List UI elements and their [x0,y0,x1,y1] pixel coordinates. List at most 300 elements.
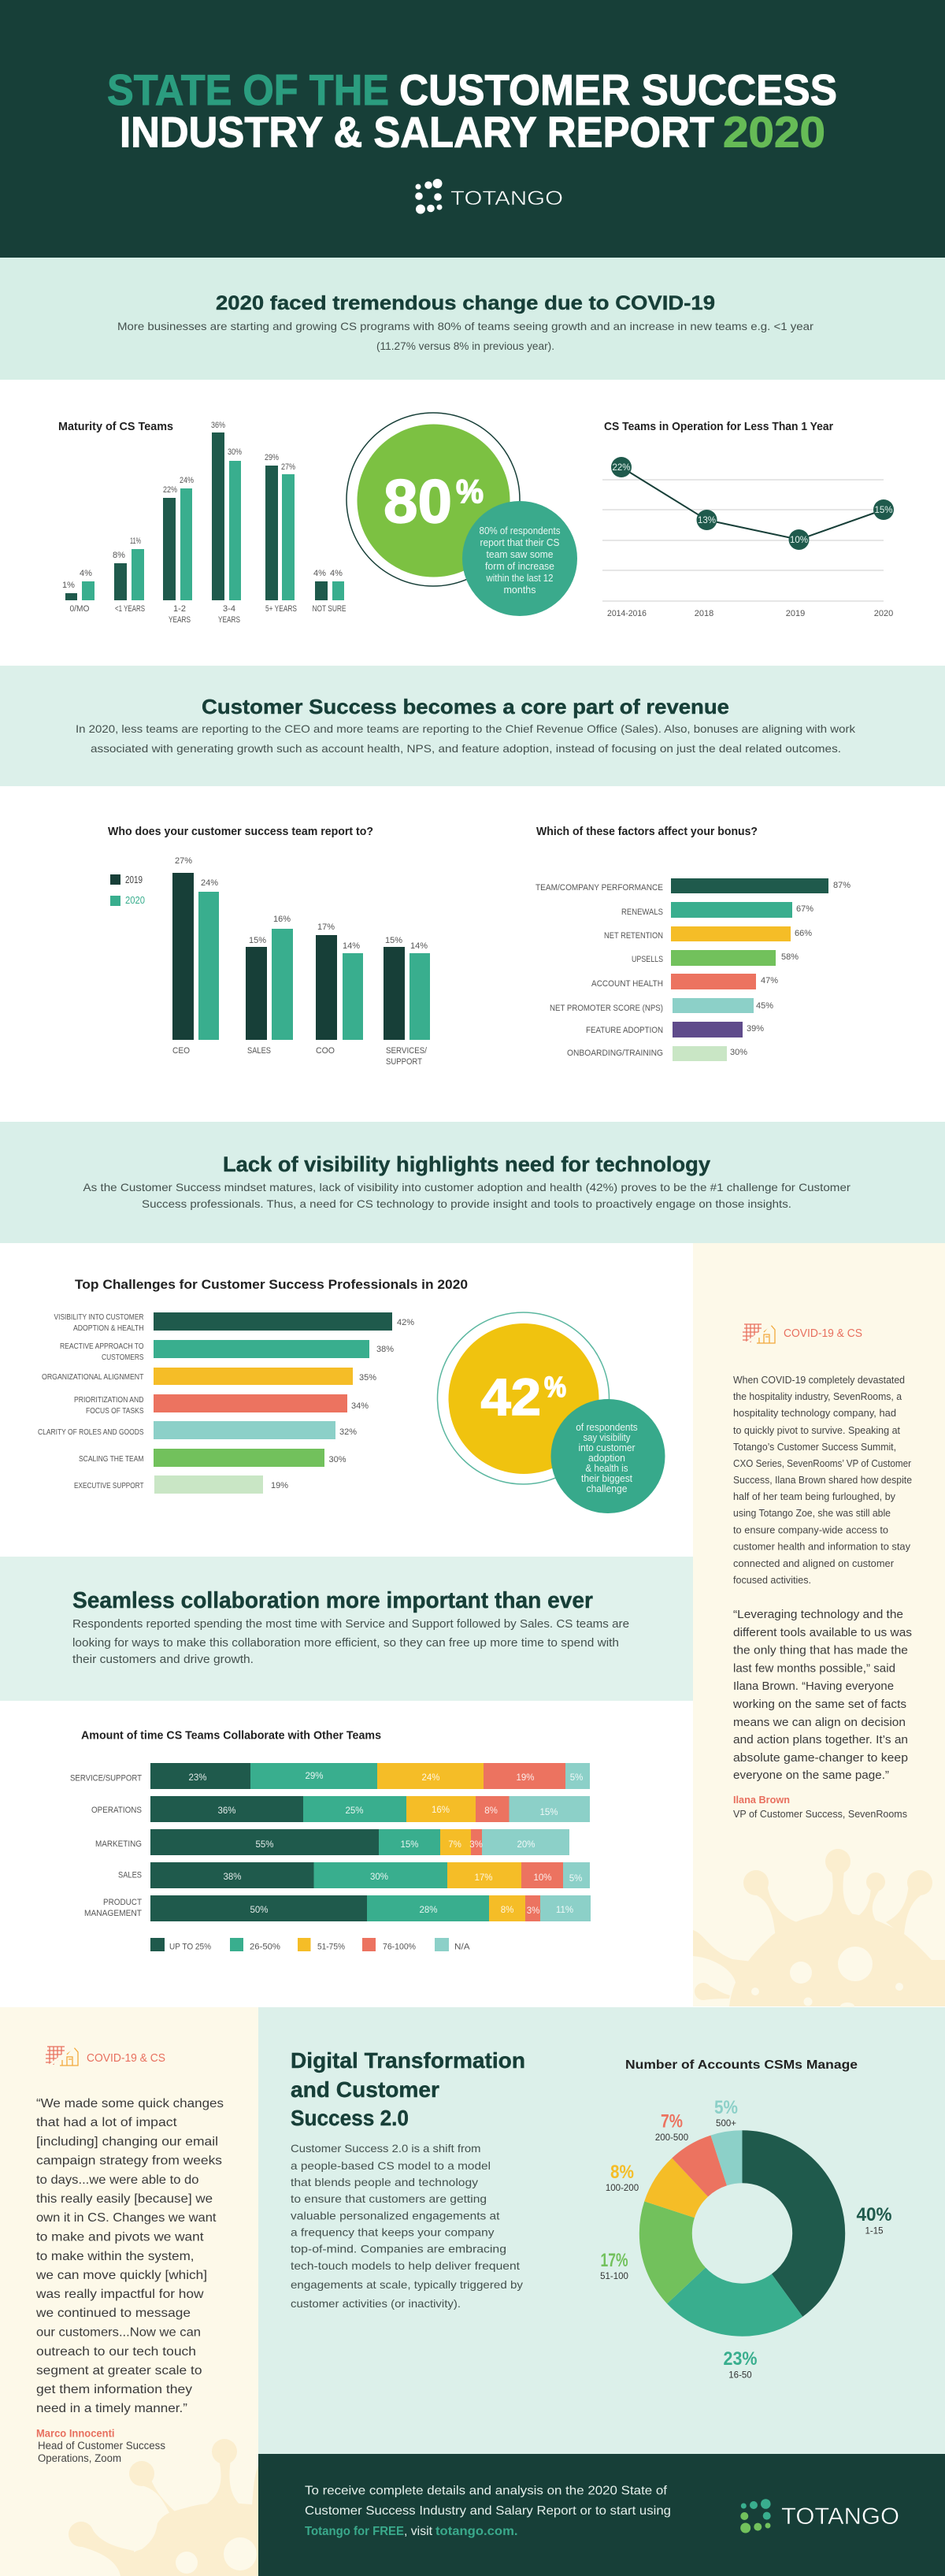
callout bubble: of respondents [576,1422,638,1433]
donut labels [600,2097,891,2381]
legend: N/A [454,1943,470,1952]
chart title: CS Teams in Operation for Less Than 1 Year [604,420,833,433]
value labels: 8% [113,551,125,560]
quote: segment at greater scale to [36,2364,202,2377]
bar values: 32% [339,1427,357,1437]
bar labels: PRIORITIZATION AND [74,1395,144,1405]
donut labels: 16-50 [728,2371,752,2381]
heading: Success 2.0 [291,2106,409,2130]
attribution [36,2428,165,2464]
chart title: Who does your customer success team report to? [108,825,373,838]
big number: 80 [384,466,452,536]
axis labels: SERVICES/ [386,1046,428,1056]
story text: Totango’s Customer Success Summit, [733,1441,896,1453]
axis labels: 2020 [874,609,893,618]
bar values: 45% [756,1001,773,1011]
row: marketing: 20% [517,1840,536,1850]
bar labels [38,1312,144,1490]
footer text: Customer Success Industry and Salary Report or to start using [305,2504,671,2518]
row: product management: 3% [527,1906,539,1916]
heading: 2020 faced tremendous change due to COVID-19 [216,292,715,314]
value labels [175,856,428,951]
bar values: 66% [795,929,812,938]
quote: this really easily [because] we [36,2192,213,2206]
heading: Seamless collaboration more important than ever [72,1588,593,1613]
section text: As the Customer Success mindset matures, lack of visibility into customer adoption and health (42%) proves to be the #1 challenge for Customer [83,1181,850,1193]
title: INDUSTRY & SALARY REPORT [120,107,714,156]
story text: the hospitality industry, SevenRooms, a [733,1390,902,1402]
bar values [271,1318,414,1490]
footer text [305,2485,671,2538]
value labels: 4% [330,569,343,578]
row: operations: 16% [432,1806,450,1815]
bar values: 87% [833,881,850,890]
legend [110,874,145,906]
legend: 26-50% [250,1943,280,1952]
row: product management: 28% [419,1906,438,1915]
body text: customer activities (or inactivity). [291,2297,461,2310]
section text: Respondents reported spending the most time with Service and Support followed by Sales. CS teams are [72,1617,629,1631]
intro text: More businesses are starting and growing CS programs with 80% of teams seeing growth and an increase in new teams e.g. <1 year [117,320,813,332]
bar values: 38% [376,1345,394,1354]
row: product management: 8% [501,1906,513,1915]
virus spots [751,1947,903,2010]
bars 2019 [172,873,405,1040]
value labels: 4% [80,569,92,578]
value labels: 29% [265,453,279,462]
row labels [70,1774,142,1918]
data points: 15% [874,506,893,515]
bar values: 34% [351,1401,369,1411]
axis labels: 2018 [695,609,713,618]
bar values: 30% [730,1048,747,1057]
section text: Success professionals. Thus, a need for CS technology to provide insight and tools to proactively engage on those insights. [142,1197,791,1210]
body text: valuable personalized engagements at [291,2209,500,2222]
bar labels: ORGANIZATIONAL ALIGNMENT [42,1372,144,1382]
row: service/support: 19% [516,1773,535,1783]
intro text: (11.27% versus 8% in previous year). [376,340,554,352]
footer text: , visit [404,2525,433,2538]
bar labels: EXECUTIVE SUPPORT [74,1481,144,1490]
body text [291,2142,523,2310]
story text: hospitality technology company, had [733,1407,896,1419]
intro text [117,320,813,352]
bar labels: CLARITY OF ROLES AND GOODS [38,1427,143,1437]
axis labels: COO [316,1046,335,1056]
value labels: 15% [249,936,266,945]
axis labels: NOT SURE [312,604,346,614]
icon: building and house [743,1322,775,1345]
body text: Customer Success 2.0 is a shift from [291,2142,480,2155]
bar values: 19% [271,1481,288,1490]
callout bubble: form of increase [485,561,554,572]
quote: different tools available to us was [733,1627,912,1639]
quote: to days...we were able to do [36,2173,199,2187]
axis labels: 3-4 [223,604,235,614]
body text: a frequency that keeps your company [291,2226,495,2239]
heading: and Customer [291,2077,439,2102]
big number: % [544,1371,566,1403]
quote: we can move quickly [which] [35,2269,207,2282]
row labels: MANAGEMENT [84,1909,142,1918]
donut slices [665,2157,819,2310]
callout bubble [551,1399,665,1513]
heading [291,2048,525,2130]
axis labels: 5+ YEARS [265,604,297,614]
story text: half of her team being furloughed, by [733,1490,895,1502]
value labels: 16% [273,915,291,924]
value labels: 4% [313,569,326,578]
bar labels: ADOPTION & HEALTH [73,1323,143,1333]
callout: 80% [346,413,577,616]
body text: tech-touch models to help deliver frequent [291,2259,520,2272]
panel: COVID-19 and CS, SevenRooms [693,1243,945,2010]
quote: own it in CS. Changes we want [36,2211,217,2225]
footer call to action [258,2454,945,2576]
value labels: 24% [201,878,218,888]
value labels: 36% [211,421,225,430]
section text: looking for ways to make this collaboration more efficient, so they can free up more time to spend with [72,1636,619,1650]
section: revenue [0,666,945,786]
quote: and action plans together. It’s an [733,1734,908,1746]
axis labels: YEARS [169,615,191,625]
donut labels: 23% [723,2348,758,2370]
bar labels: REACTIVE APPROACH TO [60,1342,143,1351]
row labels: OPERATIONS [91,1806,142,1815]
attribution: VP of Customer Success, SevenRooms [733,1808,907,1820]
bar chart: top challenges [38,1277,468,1494]
donut labels: 17% [600,2250,628,2271]
row: marketing: 3% [469,1840,483,1850]
quote [732,1609,912,1782]
axis labels [172,1046,428,1067]
value labels: 14% [410,941,428,951]
data points [611,457,894,550]
callout bubble: team saw some [487,549,554,560]
quote: “Leveraging technology and the [733,1609,903,1621]
quote: Ilana Brown. “Having everyone [733,1680,894,1693]
row: operations [150,1796,590,1822]
body text: engagements at scale, typically triggered by [291,2278,523,2291]
donut chart: number of accounts CSMs manage [600,2058,891,2381]
callout bubble: report that their CS [480,537,559,548]
legend: 76-100% [383,1943,416,1952]
bar chart: Maturity of CS Teams [58,420,346,625]
callout bubble: adoption [588,1453,625,1464]
footer text: totango.com. [435,2525,518,2538]
bar chart: factors affecting bonus [536,825,850,1061]
row: service/support [150,1763,590,1789]
row: marketing [150,1829,569,1855]
bar labels: CUSTOMERS [102,1353,143,1362]
row: marketing: 55% [255,1840,274,1850]
row: sales [150,1862,590,1888]
bar labels: TEAM/COMPANY PERFORMANCE [536,883,663,893]
axis labels: <1 YEARS [115,604,145,614]
quote: our customers...Now we can [36,2325,201,2340]
chart title: Maturity of CS Teams [58,420,173,433]
row: sales: 38% [223,1873,242,1882]
bar values: 47% [761,976,778,985]
story text: CXO Series, SevenRooms’ VP of Customer [733,1457,912,1469]
value labels [62,421,343,590]
body text: a people-based CS model to a model [291,2159,491,2172]
attribution: Marco Innocenti [36,2428,115,2439]
callout bubble [462,501,577,616]
value labels: 14% [343,941,360,951]
title: 2020 [723,107,825,156]
row labels: PRODUCT [103,1898,142,1907]
attribution: Head of Customer Success [38,2440,165,2452]
quote: was really impactful for how [35,2288,204,2301]
row: service/support: 23% [188,1773,207,1783]
chart title: Number of Accounts CSMs Manage [625,2058,858,2072]
row: operations: 36% [217,1806,236,1816]
row: operations: 8% [484,1806,498,1816]
bars 2019 series [65,432,328,600]
attribution: Ilana Brown [733,1794,790,1806]
row: sales: 30% [370,1873,388,1882]
chart title: Amount of time CS Teams Collaborate with Other Teams [81,1728,381,1743]
axis labels: 1-2 [173,604,186,614]
quote: working on the same set of facts [732,1698,906,1711]
data points: 10% [790,536,808,545]
quote: to make and pivots we want [36,2231,204,2244]
quote: “We made some quick changes [36,2097,224,2110]
row: marketing: 7% [448,1840,461,1850]
logo: Totango colour [740,2499,899,2533]
legend: UP TO 25% [169,1943,211,1952]
heading: Digital Transformation [291,2048,525,2073]
quote: absolute game-changer to keep [733,1752,908,1765]
story text: Success, Ilana Brown shared how despite [733,1474,912,1486]
bar values: 67% [796,904,813,914]
row labels: SALES [118,1870,142,1880]
axis labels: SALES [247,1046,271,1056]
line chart: CS Teams in Operation for Less Than 1 Year [602,420,894,618]
quote: the only thing that has made the [733,1645,908,1657]
callout bubble: say visibility [583,1432,631,1443]
big number: 42 [480,1368,541,1426]
value labels: 17% [317,922,335,932]
story text: using Totango Zoe, she was still able [733,1507,891,1519]
trend line [621,467,884,540]
callout bubble: into customer [578,1442,635,1453]
stacked bar chart: collaboration with other teams [70,1728,591,1952]
title [107,65,837,156]
donut labels: 7% [661,2111,683,2132]
row: sales: 17% [474,1873,493,1883]
bar chart: who does your team report to [108,825,430,1067]
big number [384,466,484,536]
quote: outreach to our tech touch [36,2345,196,2359]
row: service/support: 24% [421,1773,440,1783]
row: service/support: 29% [305,1772,324,1781]
logo: Totango white [415,179,563,214]
axis labels: YEARS [218,615,240,625]
donut labels: 1-15 [865,2226,884,2236]
quote: get them information they [36,2383,192,2396]
legend: 2020 [125,894,145,906]
attribution: Operations, Zoom [38,2452,121,2464]
row: sales: 10% [533,1873,552,1883]
value labels: 27% [175,856,192,866]
value labels: 22% [163,485,177,495]
quote: need in a timely manner.” [36,2402,187,2415]
callout bubble: 80% of respondents [479,525,561,536]
donut labels: 100-200 [606,2184,639,2193]
bar labels: FOCUS OF TASKS [86,1406,143,1416]
legend: 51-75% [317,1943,345,1952]
callout bubble: months [504,585,536,596]
callout bubble: within the last 12 [486,573,554,584]
callout: 42% [438,1312,665,1513]
axis labels [69,604,346,625]
bars 2020 series [82,461,344,600]
row: product management: 11% [556,1906,573,1915]
value labels: 30% [228,447,242,457]
chart title: Which of these factors affect your bonus? [536,825,758,838]
title: STATE OF THE [107,65,389,114]
bar labels: SCALING THE TEAM [79,1454,143,1464]
body text: to ensure that customers are getting [291,2192,487,2205]
section text: In 2020, less teams are reporting to the CEO and more teams are reporting to the Chief Revenue Office (Sales). Also, bonuses are aligning with work [76,722,856,735]
axis labels: 2014-2016 [607,609,647,618]
callout bubble: their biggest [581,1473,632,1484]
section text [72,1617,629,1666]
story text: to ensure company-wide access to [733,1524,888,1536]
story text: focused activities. [733,1574,811,1586]
value labels: 1% [62,581,75,590]
section intro: COVID-19 change [0,258,945,380]
story text: to quickly pivot to survive. Speaking at [733,1424,900,1436]
heading: Lack of visibility highlights need for technology [223,1153,710,1176]
panel heading: COVID-19 & CS [87,2051,165,2065]
donut labels: 5% [714,2097,738,2118]
footer text: To receive complete details and analysis on the 2020 State of [305,2485,668,2497]
chart title: Top Challenges for Customer Success Professionals in 2020 [75,1277,468,1292]
panel: digital transformation [258,2007,945,2454]
attribution [733,1794,907,1820]
axis labels [607,609,893,618]
virus illustration [69,2439,258,2576]
bar labels: NET RETENTION [604,931,663,941]
section text [83,1181,850,1210]
header banner [0,0,945,258]
quote: means we can align on decision [733,1717,906,1729]
heading: Customer Success becomes a core part of revenue [202,695,729,718]
bar values: 42% [397,1318,414,1327]
quote [35,2097,224,2415]
story text: customer health and information to stay [733,1541,910,1552]
section text: their customers and drive growth. [72,1653,254,1666]
quote: that had a lot of impact [36,2116,177,2129]
bar values: 30% [329,1455,346,1464]
quote: to make within the system, [36,2250,194,2263]
story text: connected and aligned on customer [733,1557,895,1569]
row: product management [150,1895,591,1921]
virus spots [176,2537,257,2574]
bar values [730,881,850,1057]
bar labels: ONBOARDING/TRAINING [567,1049,663,1058]
quote: last few months possible,” said [733,1662,895,1675]
row: sales: 5% [569,1874,582,1884]
axis labels: 2019 [786,609,805,618]
footer text: Totango for FREE [305,2525,404,2538]
story text: When COVID-19 completely devastated [733,1374,905,1386]
quote: campaign strategy from weeks [36,2154,222,2168]
bar values: 35% [359,1373,376,1383]
bars [671,878,828,1061]
row: service/support: 5% [570,1773,583,1783]
bar values: 39% [747,1024,764,1034]
legend [150,1938,470,1952]
bar labels: ACCOUNT HEALTH [591,979,663,989]
donut labels: 200-500 [655,2133,688,2143]
logo: Totango white: TOTANGO [450,187,563,210]
bar labels: FEATURE ADOPTION [586,1026,663,1035]
data points: 22% [612,463,631,473]
axis labels: SUPPORT [386,1057,422,1067]
value labels: 15% [385,936,402,945]
data points: 13% [698,516,716,525]
axis labels: 0/MO [69,604,90,614]
row: product management: 50% [250,1906,269,1915]
logo: Totango colour: TOTANGO [781,2504,899,2530]
callout bubble: & health is [586,1463,628,1474]
row: operations: 25% [345,1806,364,1816]
value labels: 24% [180,476,194,485]
donut labels: 8% [610,2162,634,2183]
title: CUSTOMER SUCCESS [399,65,837,114]
value labels: 27% [281,462,295,472]
quote: everyone on the same page.” [733,1769,889,1782]
big number [480,1368,566,1426]
big number: % [456,473,484,510]
donut labels: 40% [857,2204,891,2225]
section: lack of visibility [0,1122,945,1243]
axis labels: CEO [172,1046,190,1056]
bar labels: NET PROMOTER SCORE (NPS) [550,1004,663,1013]
value labels: 11% [130,536,141,546]
section text: associated with generating growth such as account health, NPS, and feature adoption, instead of focusing on just the deal related outcomes. [91,742,841,755]
callout bubble: challenge [586,1483,628,1494]
row: operations: 15% [539,1808,558,1817]
row labels: MARKETING [95,1839,142,1849]
quote: we continued to message [35,2307,191,2320]
body text: that blends people and technology [291,2176,478,2188]
bar values: 58% [781,952,799,962]
row labels: SERVICE/SUPPORT [70,1774,142,1784]
body text: top-of-mind. Companies are embracing [291,2242,506,2255]
bar labels: VISIBILITY INTO CUSTOMER [54,1312,144,1322]
icon: building and house [46,2044,78,2067]
quote: [including] changing our email [36,2135,218,2149]
bars 2020 [198,892,430,1040]
section: seamless collaboration [0,1557,693,1701]
row: marketing: 15% [400,1840,419,1850]
virus illustration [693,1849,945,2006]
panel: COVID-19 and CS, Zoom quote [0,2007,258,2576]
bar labels: UPSELLS [632,955,663,964]
section text [76,722,856,755]
legend: 2019 [125,874,143,885]
bar labels: RENEWALS [621,908,663,917]
donut labels: 51-100 [600,2272,628,2281]
panel heading: COVID-19 & CS [784,1327,862,1340]
donut labels: 500+ [716,2119,736,2129]
bar labels [536,883,663,1058]
